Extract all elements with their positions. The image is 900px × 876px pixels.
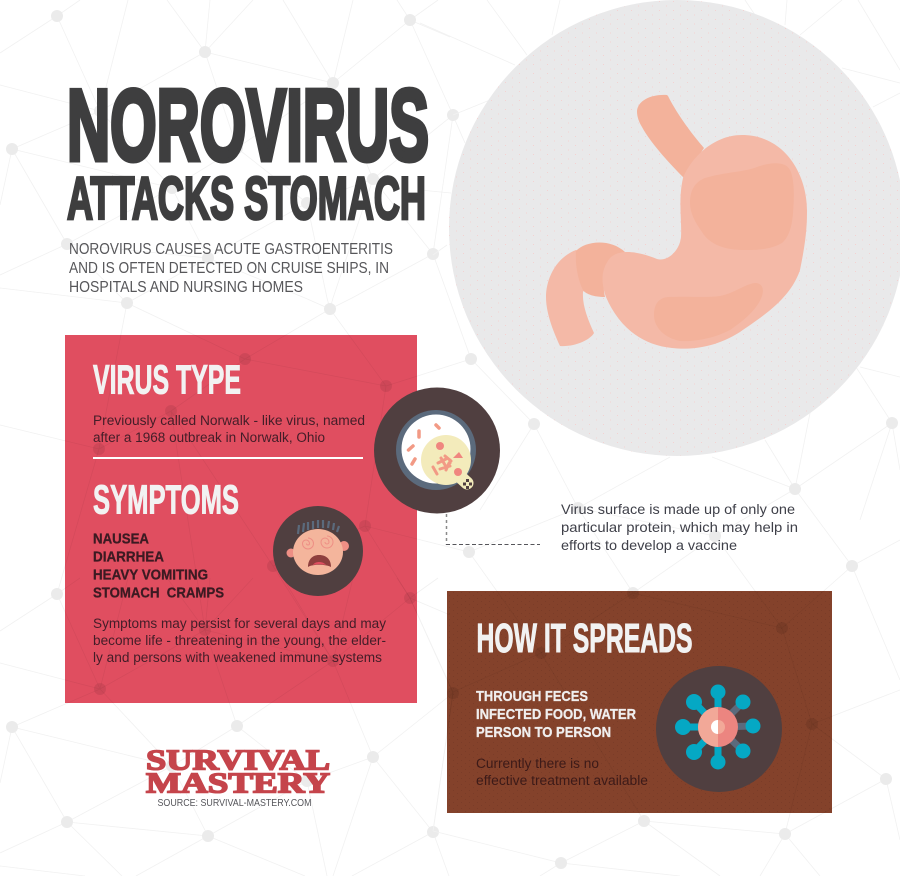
callout: virus surface: efforts to develop a vaccine: [561, 537, 737, 553]
callout: virus surface: Virus surface is made up of only one: [561, 501, 795, 517]
panel: symptoms text: [93, 476, 386, 665]
heading: how it spreads: HOW IT SPREADS: [476, 615, 692, 661]
title line 2: ATTACKS STOMACH: [67, 165, 426, 232]
logo: survival mastery: [146, 744, 330, 799]
logo: survival mastery: MASTERY: [146, 767, 330, 799]
upper stomach patch: [690, 163, 794, 250]
subtitle: NOROVIRUS CAUSES ACUTE GASTROENTERITIS: [69, 241, 393, 258]
symptoms list: DIARRHEA: [93, 550, 164, 566]
symptoms list: STOMACH CRAMPS: [93, 586, 224, 602]
network overlay on panels: [65, 335, 818, 735]
virus type description: after a 1968 outbreak in Norwalk, Ohio: [93, 430, 325, 445]
treatment note: Currently there is no: [476, 756, 599, 771]
symptoms description: Symptoms may persist for several days and may: [93, 616, 386, 631]
symptoms list: HEAVY VOMITING: [93, 568, 208, 584]
duodenum: [546, 242, 625, 346]
symptoms list: [93, 532, 224, 602]
treatment note: effective treatment available: [476, 773, 648, 788]
transmission list: THROUGH FECES: [476, 689, 588, 705]
virus type description: [93, 413, 365, 445]
title: [67, 70, 429, 232]
panel: virus type and symptoms background: [65, 335, 417, 703]
heading: virus type: VIRUS TYPE: [93, 356, 241, 402]
icon: sick face: [273, 506, 363, 596]
transmission list: INFECTED FOOD, WATER: [476, 707, 636, 723]
transmission list: [476, 689, 636, 741]
icon: virus particle: [656, 666, 782, 792]
grey circle behind stomach: [449, 0, 900, 456]
symptoms description: [93, 616, 386, 665]
panel: how it spreads text: [476, 615, 692, 788]
panel: virus type text: [93, 356, 365, 445]
callout: virus surface: particular protein, which may help in: [561, 519, 798, 535]
subtitle: [69, 241, 393, 296]
treatment note: [476, 756, 648, 788]
symptoms description: become life - threatening in the young, the elder-: [93, 633, 386, 648]
symptoms description: ly and persons with weakened immune systems: [93, 650, 382, 665]
source line: SOURCE: SURVIVAL-MASTERY.COM: [158, 797, 312, 809]
subtitle: HOSPITALS AND NURSING HOMES: [69, 279, 303, 296]
title line 1: NOROVIRUS: [67, 70, 429, 182]
transmission list: PERSON TO PERSON: [476, 725, 611, 741]
oesophagus: [637, 95, 704, 178]
stomach illustration: [449, 0, 900, 456]
symptoms list: NAUSEA: [93, 532, 149, 548]
lower stomach patch: [654, 283, 763, 341]
logo: survival mastery: SURVIVAL: [146, 744, 330, 776]
subtitle: AND IS OFTEN DETECTED ON CRUISE SHIPS, IN: [69, 260, 389, 277]
callout: virus surface: [561, 501, 798, 553]
heading: symptoms: SYMPTOMS: [93, 476, 239, 522]
panel: how it spreads background: [447, 591, 832, 813]
stomach body: [603, 135, 807, 349]
virus type description: Previously called Norwalk - like virus, named: [93, 413, 365, 428]
dashed connector: [446, 514, 540, 545]
icon: virus under magnifier: [374, 388, 500, 514]
